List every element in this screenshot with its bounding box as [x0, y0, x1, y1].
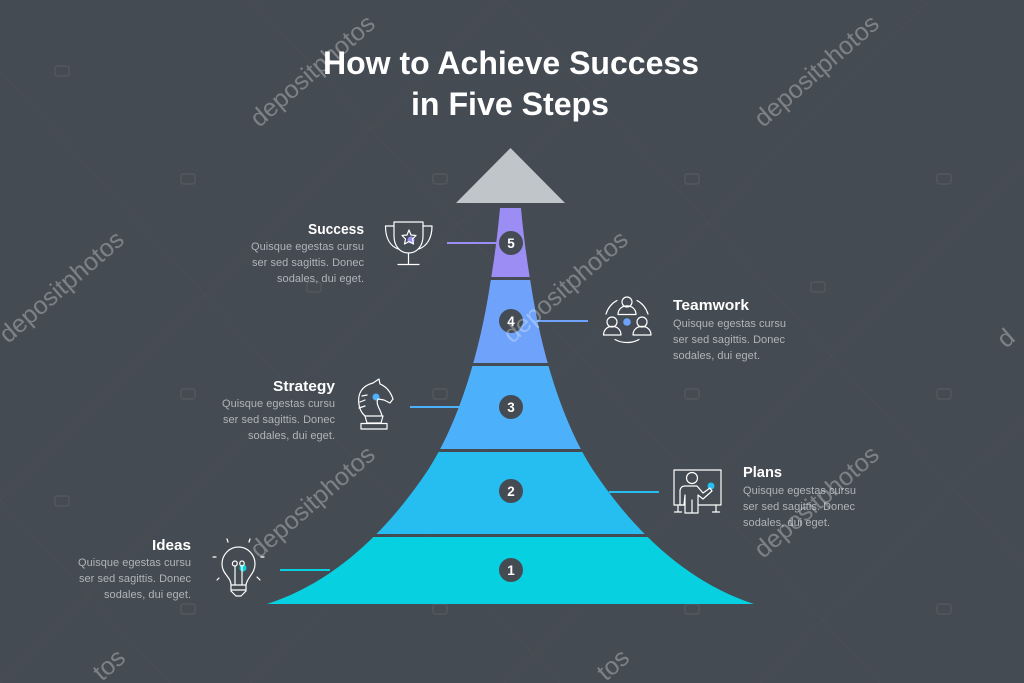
segment 4: [473, 280, 548, 363]
text: ideas: Quisque egestas cursu: [78, 557, 191, 569]
step number 4: [499, 309, 523, 333]
text: teamwork: sodales, dui eget.: [673, 350, 760, 362]
text: strategy: [222, 379, 336, 442]
icon: light bulb: [213, 539, 264, 596]
text: strategy: Strategy: [273, 379, 335, 395]
segment 2: [376, 452, 645, 534]
connector 1: [280, 569, 330, 571]
watermark text: depositphotos: [245, 9, 381, 133]
text: strategy: ser sed sagittis. Donec: [223, 414, 336, 426]
text: plans: [743, 465, 856, 529]
text: plans: ser sed sagittis. Donec: [743, 501, 856, 513]
watermark text: depositphotos: [245, 440, 381, 564]
segment 5: [491, 208, 530, 277]
connector 5: [447, 242, 499, 244]
title: How to Achieve Success: [323, 45, 699, 81]
text: ideas: [78, 538, 192, 601]
text: success: ser sed sagittis. Donec: [252, 257, 364, 269]
segment 3: [440, 366, 581, 449]
text: teamwork: Quisque egestas cursu: [673, 318, 786, 330]
text: strategy: sodales, dui eget.: [248, 430, 335, 442]
text: success: Quisque egestas cursu: [251, 241, 364, 253]
step number 5: 5: [507, 236, 515, 251]
text: teamwork: Teamwork: [673, 298, 750, 314]
text: ideas: Ideas: [152, 538, 191, 554]
step number 4: 4: [507, 314, 515, 329]
icon: team: [604, 297, 651, 342]
text: success: Success: [308, 222, 364, 238]
icon: chess knight: [359, 379, 393, 429]
step number 3: 3: [507, 400, 515, 415]
tapered pyramid: [267, 208, 754, 604]
arrow head: [456, 148, 565, 203]
text: plans: Quisque egestas cursu: [743, 485, 856, 497]
step number 2: [499, 479, 523, 503]
segment 1: [267, 537, 754, 604]
step number 5: [499, 231, 523, 255]
watermark text: depositphotos: [749, 9, 885, 133]
text: ideas: sodales, dui eget.: [104, 589, 191, 601]
text: plans: Plans: [743, 465, 782, 481]
watermark text: depositphotos: [498, 225, 634, 349]
title: in Five Steps: [411, 86, 609, 122]
watermark text: d: [992, 323, 1020, 354]
icon: trophy: [386, 222, 432, 264]
watermark text: depositphotos: [749, 440, 885, 564]
step number 1: 1: [507, 563, 515, 578]
text: ideas: ser sed sagittis. Donec: [79, 573, 192, 585]
step number 2: 2: [507, 484, 515, 499]
connector 4: [523, 320, 588, 322]
connector 3: [410, 406, 460, 408]
icon: presenter at board: [674, 470, 721, 513]
text: strategy: Quisque egestas cursu: [222, 398, 335, 410]
text: plans: sodales, dui eget.: [743, 517, 830, 529]
watermark camera marks: [55, 66, 951, 614]
title: [323, 45, 699, 122]
connector 2: [609, 491, 659, 493]
text: teamwork: ser sed sagittis. Donec: [673, 334, 786, 346]
text: success: [251, 222, 364, 285]
text: teamwork: [673, 298, 786, 362]
step number 3: [499, 395, 523, 419]
text: success: sodales, dui eget.: [277, 273, 364, 285]
step number 1: [499, 558, 523, 582]
